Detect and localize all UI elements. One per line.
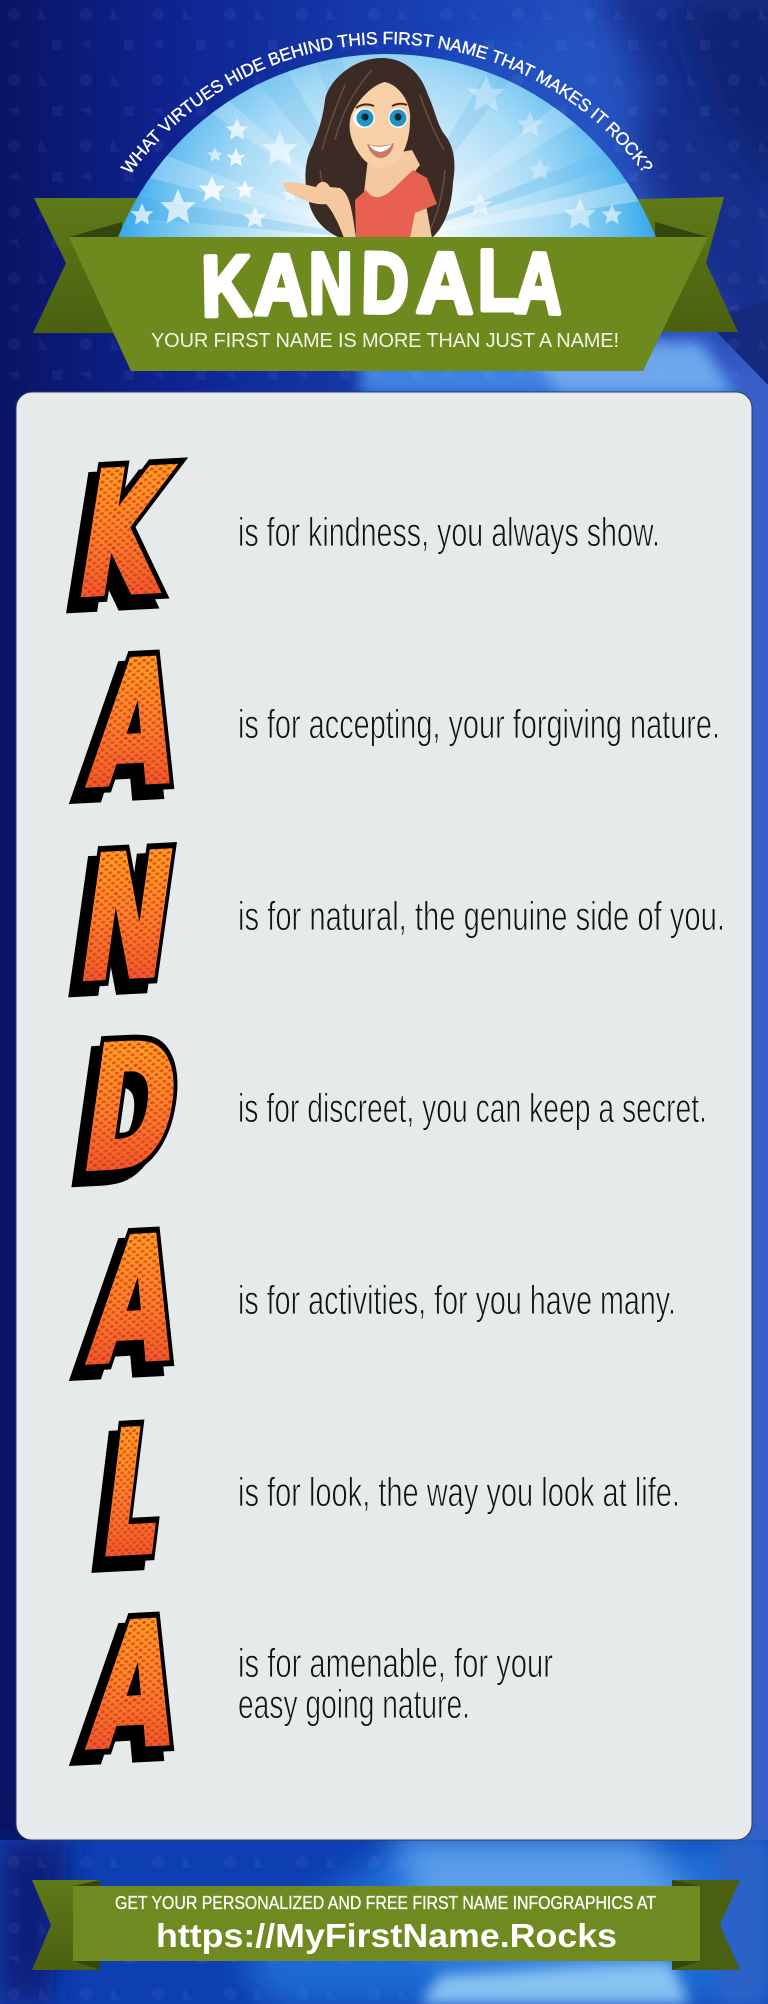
letter L: L — [95, 1397, 172, 1593]
letter A: A — [73, 1596, 177, 1796]
hair — [305, 58, 454, 238]
right arm — [408, 205, 432, 238]
panel: letters list — [16, 392, 752, 1840]
woman illustration — [283, 58, 454, 238]
top ribbon — [69, 233, 708, 371]
letter D: D — [73, 1009, 189, 1208]
row A — [73, 1586, 553, 1796]
letter A: A — [83, 624, 187, 824]
footer call to action: GET YOUR PERSONALIZED AND FREE FIRST NAME INFOGRAPHICS AT — [115, 1893, 656, 1913]
letter N: N — [60, 829, 174, 1029]
row N — [60, 819, 725, 1029]
name title: A — [254, 236, 309, 333]
letter A: A — [73, 1211, 177, 1411]
text A: is for amenable, for your — [238, 1640, 553, 1686]
letter A: A — [83, 1586, 187, 1786]
letter A: A — [73, 634, 177, 834]
ribbon tail right — [637, 197, 738, 332]
footer tail right — [672, 1880, 740, 1970]
ribbon tail left — [33, 198, 137, 333]
footer ribbon — [32, 1880, 740, 1970]
letter K: K — [68, 436, 181, 635]
row A — [73, 624, 720, 834]
letter A: A — [83, 1586, 187, 1786]
name title: D — [361, 235, 410, 332]
name title: K — [201, 238, 252, 335]
letter A: A — [83, 1586, 187, 1786]
name title: A — [513, 235, 564, 333]
letter L: L — [95, 1397, 172, 1593]
row D — [63, 1009, 707, 1218]
name title: N — [309, 235, 352, 332]
letter K: K — [68, 436, 181, 635]
ribbon main — [69, 237, 708, 371]
face — [350, 82, 410, 168]
shirt — [355, 170, 437, 238]
ribbon fold right — [655, 222, 708, 237]
name title: L — [478, 233, 518, 329]
ribbon fold left — [69, 222, 122, 237]
letter N: N — [70, 819, 184, 1019]
letter A: A — [83, 1201, 187, 1401]
letter K: K — [58, 446, 171, 645]
row A — [73, 1201, 676, 1411]
letter L: L — [95, 1397, 172, 1593]
mouth — [367, 143, 394, 158]
text A — [238, 1640, 553, 1727]
letter N: N — [70, 819, 184, 1019]
name title — [201, 233, 564, 335]
letter A: A — [83, 1201, 187, 1401]
subtitle: YOUR FIRST NAME IS MORE THAN JUST A NAME! — [151, 330, 619, 352]
row K — [58, 436, 660, 645]
letter L: L — [85, 1407, 162, 1603]
neck and chest — [364, 150, 420, 200]
letter K: K — [68, 436, 181, 635]
footer tail left — [32, 1880, 100, 1970]
letter A: A — [83, 1201, 187, 1401]
footer url: https://MyFirstName.Rocks — [156, 1917, 617, 1954]
letter N: N — [70, 819, 184, 1019]
letter D: D — [73, 1009, 189, 1208]
text A: easy going nature. — [238, 1681, 470, 1727]
name title: A — [416, 234, 474, 332]
letter A: A — [83, 624, 187, 824]
curved heading: WHAT VIRTUES HIDE BEHIND THIS FIRST NAME THAT MAKES IT ROCK? — [120, 32, 652, 172]
footer main — [73, 1886, 700, 1961]
semicircle sky with stars — [118, 54, 656, 237]
hand and forearm — [283, 182, 356, 238]
letter D: D — [73, 1009, 189, 1208]
letter A: A — [83, 624, 187, 824]
eyes — [353, 104, 408, 128]
letter D: D — [63, 1019, 179, 1218]
row L — [85, 1397, 680, 1603]
